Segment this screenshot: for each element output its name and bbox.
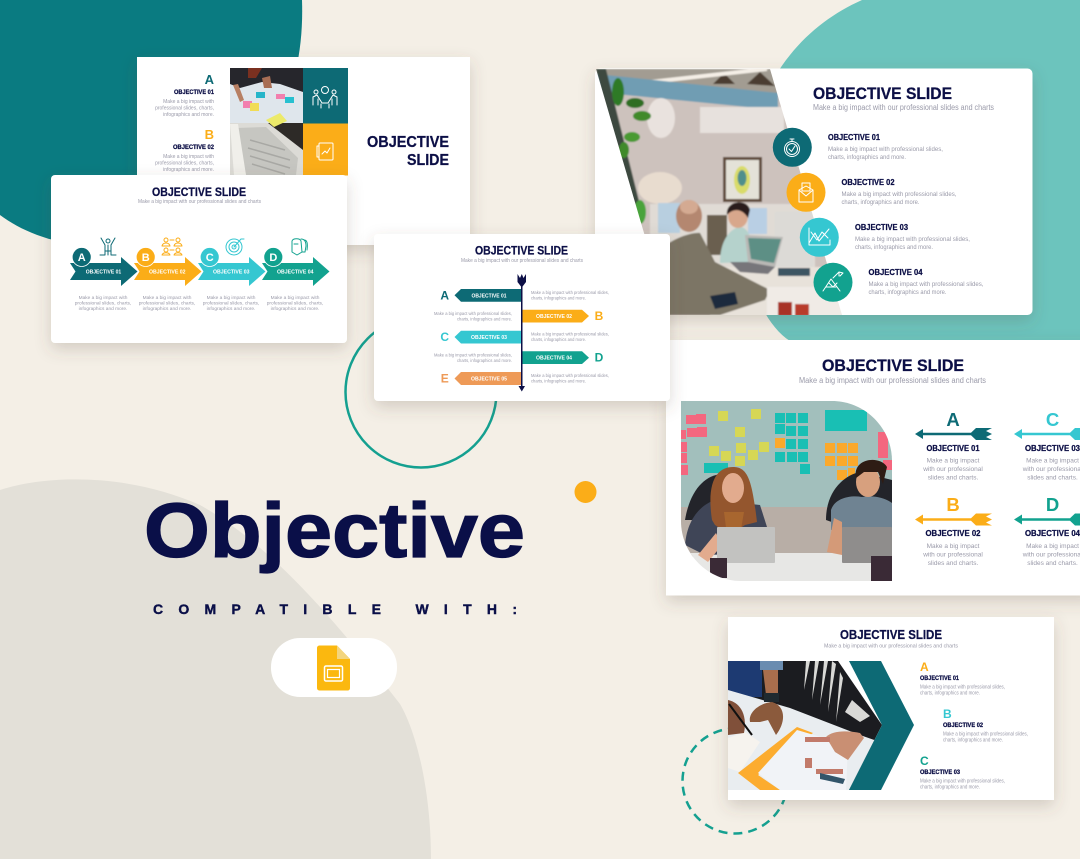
panel: slide arrows row (51, 175, 347, 343)
objective b: OBJECTIVE 02 (943, 723, 984, 729)
objective b arrow: with our professional (922, 552, 983, 558)
objective b: professional slides, charts, (155, 160, 214, 166)
objective b: Make a big impact with professional slides, (943, 732, 1028, 738)
right descriptions: charts, infographics and more. (531, 296, 586, 302)
objective b arrow: B (946, 494, 960, 515)
panel: slide bottom right with chevron (728, 617, 1054, 800)
panel: slide with meeting photo and feather arrows (666, 340, 1080, 596)
objective a: A (920, 660, 929, 674)
descriptions: professional slides, charts, (75, 300, 131, 306)
objective a arrow: with our professional (922, 466, 983, 473)
bar e: E (441, 372, 449, 386)
right descriptions: Make a big impact with professional slides, (531, 290, 609, 296)
subtitle: Make a big impact with our professional slides and charts (799, 376, 986, 385)
heading: OBJECTIVE SLIDE (152, 185, 246, 199)
objective 02: Make a big impact with professional slides, (842, 191, 957, 198)
arrow d: OBJECTIVE 04 (277, 270, 314, 276)
slide heading: OBJECTIVE (367, 134, 449, 151)
right descriptions (531, 290, 609, 384)
objective a arrow: OBJECTIVE 01 (926, 444, 980, 453)
objective 02: charts, infographics and more. (842, 199, 920, 206)
panel: slide top right with office photo (590, 67, 1032, 319)
compatible with label: COMPATIBLE WITH: (153, 601, 517, 617)
objective b (155, 127, 214, 173)
left descriptions: Make a big impact with professional slides, (434, 311, 512, 317)
objective a: Make a big impact with professional slides, (920, 684, 1005, 690)
objective a: OBJECTIVE 01 (920, 676, 960, 682)
left descriptions: Make a big impact with professional slides, (434, 352, 512, 358)
bar b (522, 309, 604, 323)
objective d arrow (1014, 494, 1080, 567)
icon: slides document (317, 646, 350, 690)
arrow a (70, 248, 138, 286)
heading: OBJECTIVE SLIDE (813, 85, 952, 103)
icon: team flow (162, 238, 182, 255)
slide heading: SLIDE (407, 152, 449, 169)
left descriptions: charts, infographics and more. (457, 316, 512, 322)
objective b arrow (915, 494, 992, 567)
objective 01: charts, infographics and more. (828, 154, 906, 161)
objective a arrow (915, 409, 992, 482)
objective c arrow: Make a big impact (1026, 458, 1079, 464)
subtitle: Make a big impact with our professional slides and charts (461, 258, 583, 264)
teal square with icon (303, 68, 348, 124)
objective a arrow: Make a big impact (927, 458, 980, 464)
objective 01 (773, 128, 943, 167)
objective a (155, 72, 215, 118)
decorative dot (574, 481, 596, 503)
objective 03: OBJECTIVE 03 (855, 223, 909, 232)
icon: profile heads (292, 239, 307, 255)
objective d arrow: OBJECTIVE 04 (1025, 529, 1080, 538)
objective b arrow: slides and charts. (928, 560, 978, 567)
descriptions: Make a big impact with (143, 295, 192, 301)
objective a: A (205, 72, 215, 87)
descriptions: professional slides, charts, (139, 300, 195, 306)
heading: OBJECTIVE SLIDE (822, 356, 964, 375)
blob: beige bottom left (0, 479, 431, 859)
objective d arrow: D (1046, 494, 1059, 515)
objective b: OBJECTIVE 02 (173, 144, 214, 151)
blob: teal top left (0, 0, 302, 245)
arrow a: OBJECTIVE 01 (86, 270, 121, 276)
objective b (943, 707, 1028, 744)
objective b arrow: OBJECTIVE 02 (926, 529, 981, 538)
bar a: OBJECTIVE 01 (472, 294, 506, 300)
bar c: OBJECTIVE 03 (471, 335, 507, 341)
panel: slide with vertical timeline (374, 234, 670, 401)
descriptions: professional slides, charts, (203, 300, 259, 306)
descriptions: infographics and more. (143, 306, 191, 312)
objective a: professional slides, charts, (155, 106, 214, 112)
objective b arrow: Make a big impact (927, 543, 980, 550)
objective b: B (205, 127, 214, 142)
icon: target (226, 239, 244, 255)
descriptions: Make a big impact with (207, 295, 256, 301)
objective a arrow: slides and charts. (928, 474, 978, 482)
arrow b: OBJECTIVE 02 (149, 270, 186, 276)
objective a: charts, infographics and more. (920, 690, 980, 696)
bar e (441, 372, 522, 386)
bar b: B (595, 309, 604, 323)
objective a: infographics and more. (163, 112, 214, 118)
main title: Objective (144, 488, 525, 574)
descriptions: Make a big impact with (271, 295, 320, 301)
objective c: Make a big impact with professional slides, (920, 778, 1005, 784)
arrow a: A (78, 252, 86, 264)
photos (230, 68, 303, 175)
objective d arrow: slides and charts. (1027, 560, 1078, 567)
objective 01: Make a big impact with professional slides, (828, 146, 943, 153)
bar c: C (440, 330, 449, 344)
arrow b: B (142, 252, 150, 264)
objective a arrow: A (946, 409, 960, 430)
arrow c: C (206, 252, 214, 264)
objective 03: charts, infographics and more. (855, 244, 933, 251)
descriptions: professional slides, charts, (267, 300, 323, 306)
objective 02 (786, 173, 957, 212)
descriptions: infographics and more. (79, 306, 127, 312)
subtitle: Make a big impact with our professional slides and charts (138, 199, 261, 205)
decorative ring (346, 316, 496, 468)
right descriptions: Make a big impact with professional slides, (531, 332, 609, 338)
heading: OBJECTIVE SLIDE (840, 628, 942, 642)
bar d: OBJECTIVE 04 (536, 356, 573, 362)
subtitle: Make a big impact with our professional slides and charts (813, 103, 994, 112)
objective c (920, 754, 1005, 790)
right descriptions: Make a big impact with professional slides, (531, 373, 609, 379)
panel: slide top left back (137, 57, 470, 245)
objective c: charts, infographics and more. (920, 784, 980, 790)
descriptions: infographics and more. (271, 306, 319, 312)
arrow d (262, 248, 330, 286)
vertical arrow (518, 274, 526, 392)
meeting photo (681, 401, 892, 581)
blob: light teal top right (741, 0, 1080, 341)
objective b: charts, infographics and more. (943, 738, 1003, 744)
objective b: B (943, 707, 952, 721)
objective c arrow: slides and charts. (1027, 474, 1078, 482)
arrow b (134, 248, 202, 286)
objective a (920, 660, 1005, 696)
objective d arrow: Make a big impact (1026, 543, 1079, 550)
office photo (590, 67, 850, 319)
objective 01: OBJECTIVE 01 (828, 133, 881, 142)
objective b: infographics and more. (163, 167, 214, 173)
objective 02: OBJECTIVE 02 (842, 178, 895, 187)
bar a (440, 288, 522, 302)
bar a: A (440, 288, 449, 302)
descriptions (75, 295, 323, 312)
bar c (440, 330, 522, 344)
objective 03: Make a big impact with professional slides, (855, 236, 970, 243)
descriptions: Make a big impact with (79, 295, 128, 301)
objective 04: charts, infographics and more. (868, 289, 947, 296)
subtitle: Make a big impact with our professional slides and charts (824, 644, 958, 650)
bar e: OBJECTIVE 05 (471, 376, 507, 382)
bar d (522, 351, 604, 365)
objective c arrow: OBJECTIVE 03 (1025, 444, 1080, 453)
objective a: OBJECTIVE 01 (174, 89, 214, 96)
decorative dashed ring (682, 728, 788, 834)
desk photo (728, 661, 888, 791)
objective 04: OBJECTIVE 04 (868, 268, 923, 277)
slide heading (367, 134, 449, 169)
bar d: D (595, 351, 604, 365)
objective b: Make a big impact with (163, 154, 214, 160)
arrow d: D (269, 252, 277, 264)
objective c arrow: C (1046, 409, 1059, 430)
left descriptions (434, 311, 512, 364)
objective a: Make a big impact with (163, 99, 214, 105)
objective c arrow (1014, 409, 1080, 482)
descriptions: infographics and more. (207, 306, 255, 312)
arrow c (198, 248, 266, 286)
objective 03 (800, 218, 970, 257)
heading: OBJECTIVE SLIDE (475, 244, 568, 258)
objective 04 (814, 263, 984, 302)
timeline bars (440, 288, 604, 386)
teal chevron (849, 661, 914, 790)
icon: person goal (100, 238, 116, 255)
right descriptions: charts, infographics and more. (531, 337, 586, 343)
yellow square with icon (303, 124, 348, 176)
arrow c: OBJECTIVE 03 (213, 270, 250, 276)
objective 04: Make a big impact with professional slides, (868, 281, 984, 288)
bar b: OBJECTIVE 02 (536, 314, 572, 320)
objective c: OBJECTIVE 03 (920, 770, 961, 776)
objective c: C (920, 754, 929, 768)
google slides badge (271, 638, 397, 697)
left descriptions: charts, infographics and more. (457, 358, 512, 364)
right descriptions: charts, infographics and more. (531, 378, 586, 384)
